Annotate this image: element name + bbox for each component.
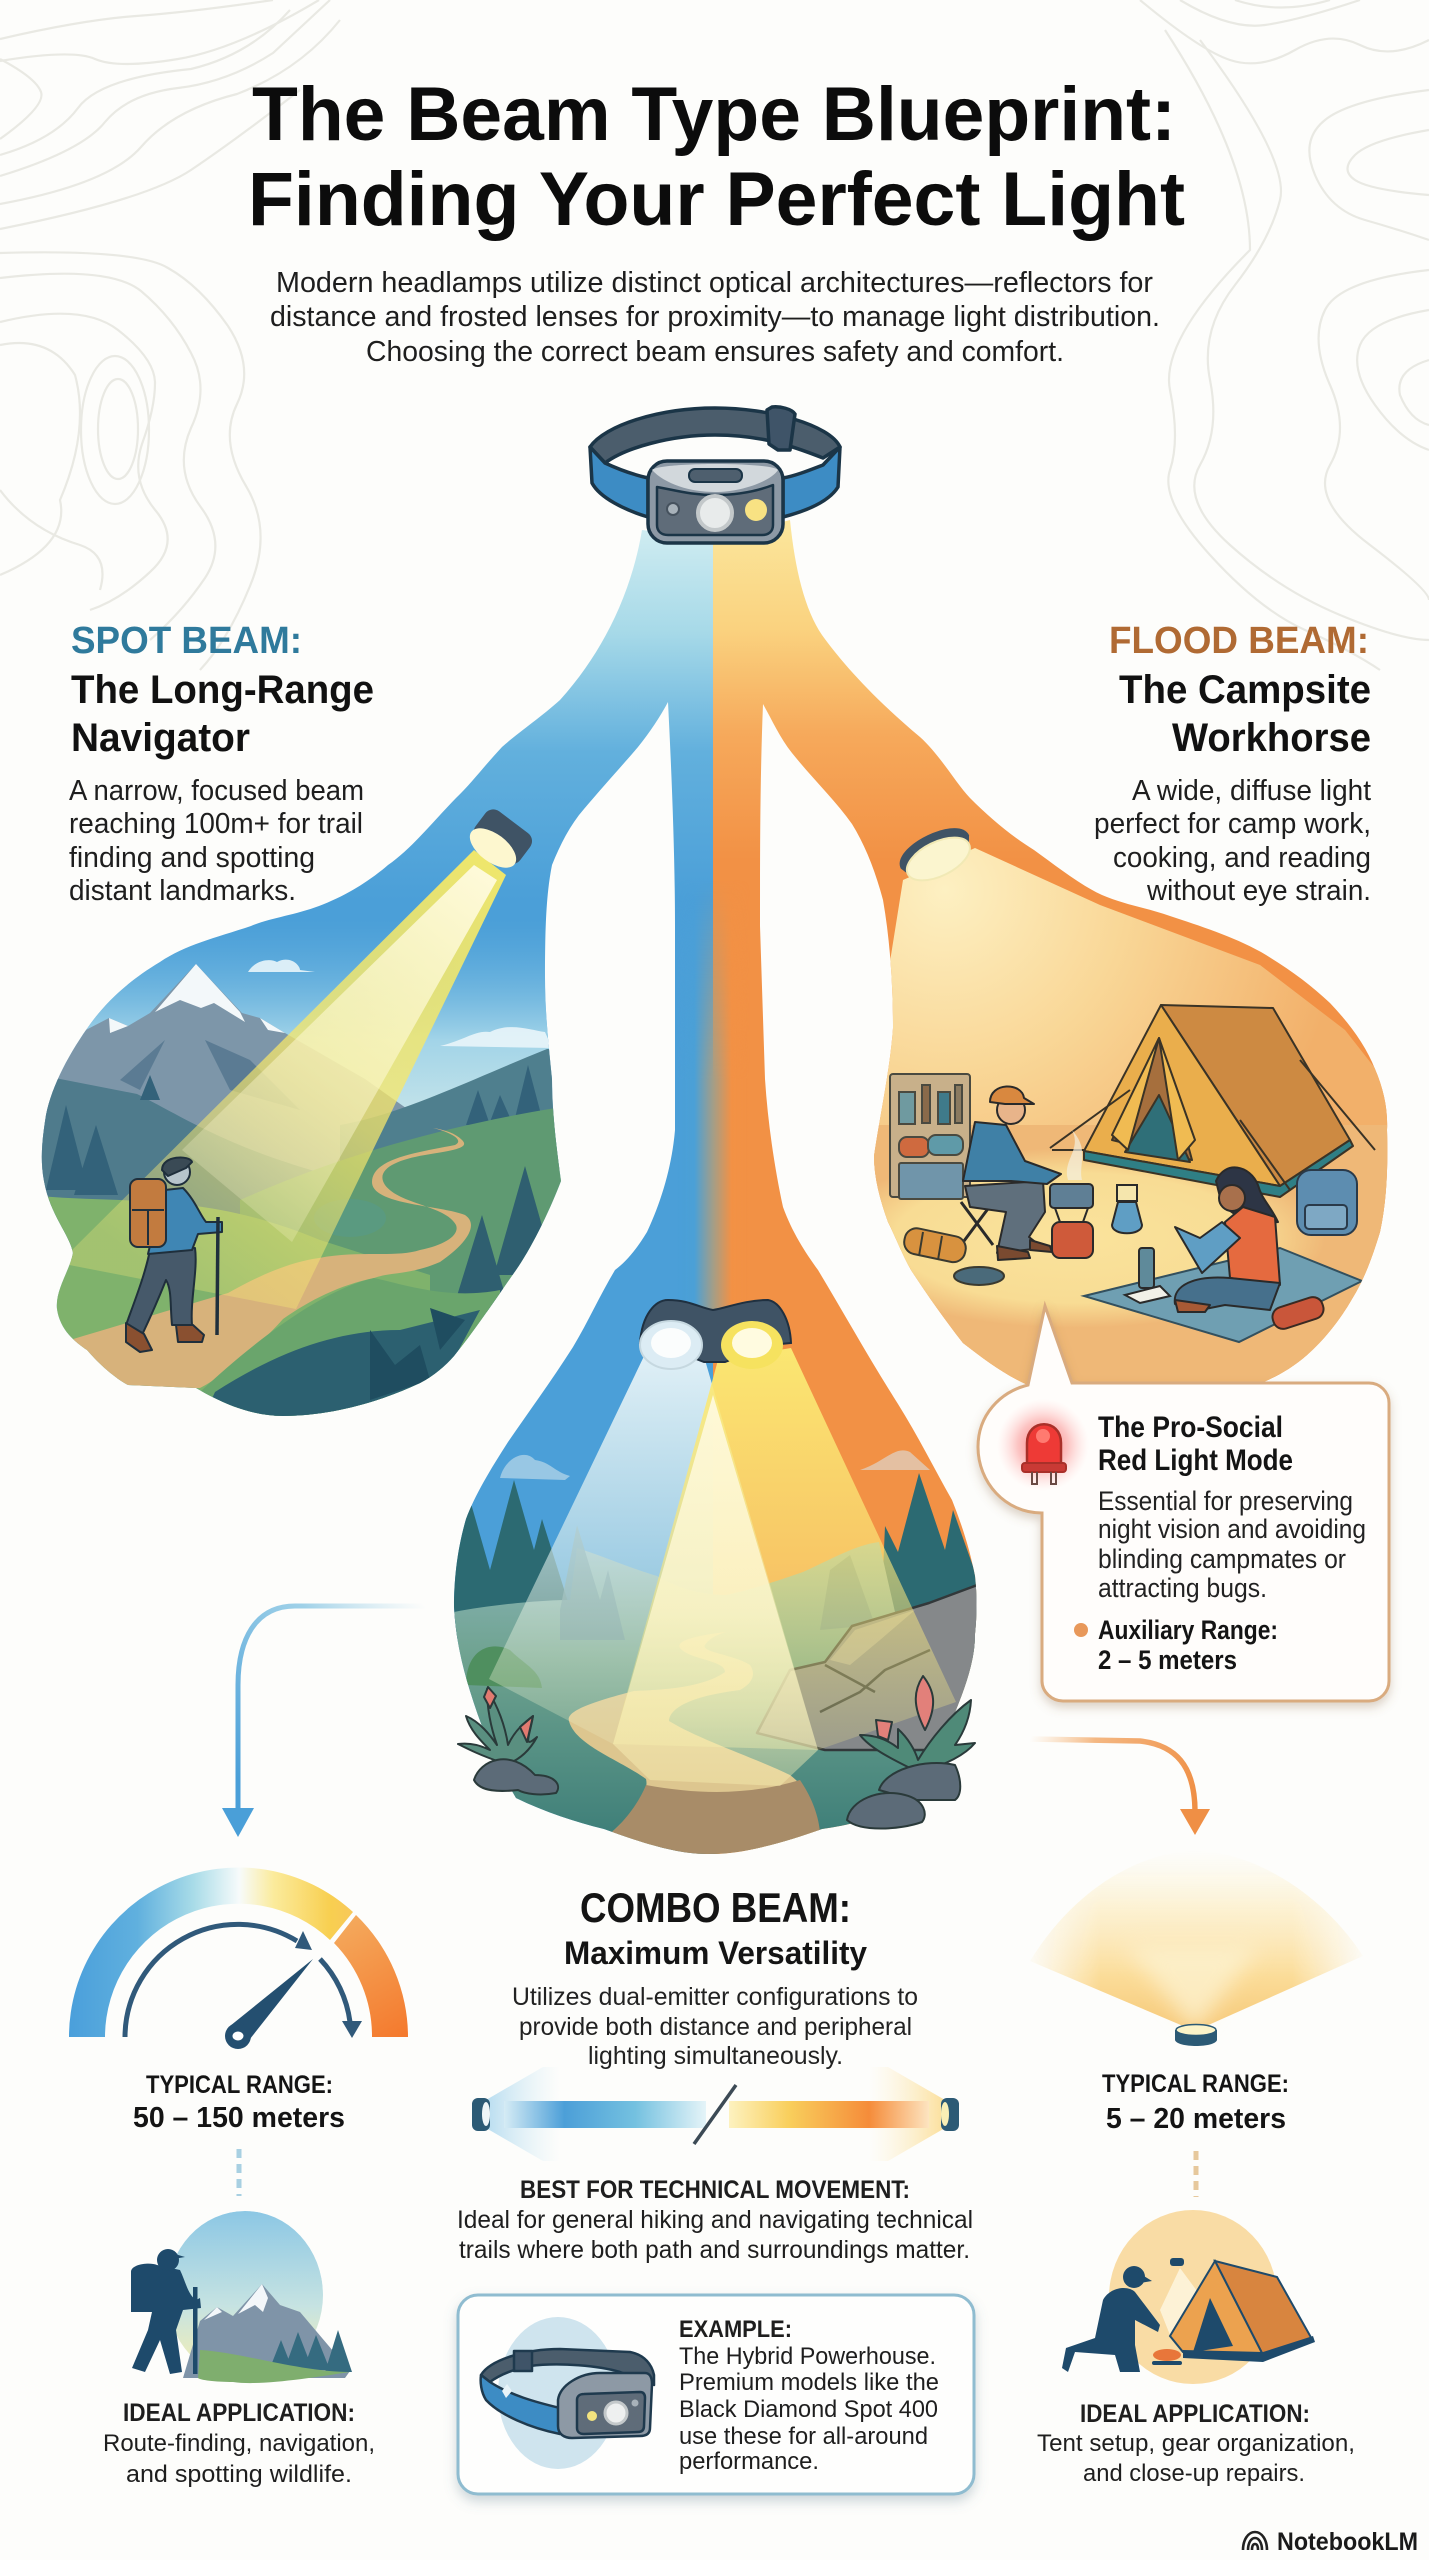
arrow: to flood details bbox=[1030, 1739, 1210, 1835]
title: The Beam Type Blueprint: bbox=[252, 72, 1176, 157]
dark hills and trees bbox=[30, 1049, 570, 1260]
auxiliary range: 2 – 5 meters bbox=[1098, 1645, 1237, 1675]
tent bbox=[1050, 1005, 1375, 1197]
intro text: distance and frosted lenses for proximity—to manage light distribution. bbox=[270, 301, 1160, 333]
auxiliary range bbox=[1074, 1615, 1278, 1675]
text: spot typical range bbox=[133, 2071, 345, 2134]
text: spot typical range: 50 – 150 meters bbox=[133, 2102, 345, 2134]
beam: spot light cone bbox=[59, 850, 506, 1309]
heading: flood beam bbox=[1109, 620, 1371, 760]
text: combo beam description: lighting simultaneously. bbox=[588, 2042, 843, 2070]
intro text: Choosing the correct beam ensures safety and comfort. bbox=[366, 336, 1064, 368]
mat bbox=[1084, 1248, 1362, 1342]
text: spot beam description: A narrow, focused beam bbox=[69, 775, 364, 807]
callout heading bbox=[1098, 1411, 1293, 1477]
example text: use these for all-around bbox=[679, 2423, 928, 2450]
text: flood beam description bbox=[1094, 775, 1371, 907]
callout body: attracting bugs. bbox=[1098, 1573, 1267, 1603]
text: flood ideal application: and close-up repairs. bbox=[1083, 2460, 1305, 2487]
woman reading bbox=[1175, 1167, 1280, 1312]
callout body: blinding campmates or bbox=[1098, 1544, 1346, 1574]
example text: Black Diamond Spot 400 bbox=[679, 2396, 938, 2423]
logo: NotebookLM: NotebookLM bbox=[1277, 2528, 1418, 2556]
heading: combo beam: COMBO BEAM: bbox=[580, 1884, 851, 1931]
chart: flood light spread bbox=[1030, 1851, 1363, 2046]
sleeping bag and lid bbox=[902, 1226, 1004, 1285]
gauge chart: spot range bbox=[69, 1867, 408, 2049]
text: spot beam description: distant landmarks. bbox=[69, 875, 296, 907]
text: best for technical movement: trails where both path and surroundings matter. bbox=[459, 2236, 970, 2264]
heading: spot beam: Navigator bbox=[71, 716, 250, 760]
headlamp: main bbox=[590, 407, 840, 543]
arrow: to spot details bbox=[222, 1606, 425, 1837]
title bbox=[248, 72, 1185, 242]
callout heading: The Pro-Social bbox=[1098, 1411, 1283, 1444]
text: spot beam description bbox=[69, 775, 364, 907]
right foreground flowers and stones bbox=[847, 1676, 975, 1828]
flood light cone bbox=[860, 848, 1400, 1400]
spot lamp bbox=[470, 809, 532, 868]
callout heading: Red Light Mode bbox=[1098, 1444, 1293, 1477]
thermos and note bbox=[1125, 1248, 1170, 1303]
heading: spot beam: SPOT BEAM: bbox=[71, 620, 302, 662]
trees left bbox=[454, 1480, 567, 1640]
trees right bbox=[884, 1473, 976, 1658]
text: flood typical range: TYPICAL RANGE: bbox=[1102, 2070, 1289, 2098]
text: spot ideal application: and spotting wildlife. bbox=[126, 2461, 352, 2488]
heading: combo beam bbox=[564, 1884, 867, 1971]
combo lamp bbox=[640, 1300, 791, 1369]
path lower shade bbox=[611, 1780, 820, 1855]
heading: spot beam bbox=[71, 620, 374, 760]
gear board and box bbox=[890, 1074, 970, 1199]
icon: example headlamp bbox=[481, 2317, 654, 2469]
left foreground flowers and stones bbox=[458, 1687, 558, 1794]
dashed connector: spot bbox=[236, 2149, 242, 2196]
topographic line pattern bbox=[0, 0, 1429, 670]
example text: Premium models like the bbox=[679, 2369, 939, 2396]
icon: hiker with mountains bbox=[131, 2211, 352, 2383]
text: spot ideal application bbox=[103, 2399, 375, 2488]
panel: spot beam scene bbox=[30, 805, 590, 1425]
dashed connector: flood bbox=[1194, 2151, 1198, 2197]
hiker bbox=[126, 1157, 222, 1352]
text: combo beam description: Utilizes dual-emitter configurations to bbox=[512, 1983, 918, 2011]
flood lamp bbox=[900, 828, 971, 881]
foreground bank with plants bbox=[190, 1278, 500, 1425]
trees: foreground right bbox=[458, 1166, 542, 1312]
trail bbox=[70, 1128, 471, 1388]
man cooking bbox=[961, 1086, 1061, 1260]
clouds bbox=[500, 1450, 930, 1480]
text: spot ideal application: IDEAL APPLICATION: bbox=[123, 2399, 355, 2427]
text: flood beam description: A wide, diffuse light bbox=[1132, 775, 1371, 807]
callout body: Essential for preserving bbox=[1098, 1486, 1353, 1516]
sky bbox=[57, 945, 561, 1339]
rocks bbox=[757, 1584, 980, 1750]
text: flood typical range: 5 – 20 meters bbox=[1106, 2103, 1286, 2135]
example text bbox=[679, 2316, 939, 2475]
text: best for technical movement: BEST FOR TECHNICAL MOVEMENT: bbox=[520, 2176, 910, 2204]
auxiliary range: Auxiliary Range: bbox=[1098, 1615, 1278, 1645]
title: Finding Your Perfect Light bbox=[248, 157, 1185, 242]
heading: flood beam: FLOOD BEAM: bbox=[1109, 620, 1369, 662]
text: flood beam description: perfect for camp work, bbox=[1094, 808, 1371, 840]
clouds bbox=[248, 960, 552, 1048]
text: combo beam description bbox=[512, 1983, 918, 2070]
heading: flood beam: Workhorse bbox=[1172, 716, 1371, 760]
text: flood beam description: cooking, and reading bbox=[1113, 842, 1371, 874]
icon: camper with tent bbox=[1062, 2210, 1315, 2384]
heading: flood beam: The Campsite bbox=[1119, 668, 1371, 712]
callout body bbox=[1098, 1486, 1366, 1603]
ground bbox=[874, 1125, 1388, 1384]
example text: performance. bbox=[679, 2448, 819, 2475]
example text: EXAMPLE: bbox=[679, 2316, 792, 2343]
distant pale trees bbox=[560, 1525, 875, 1640]
text: flood ideal application: Tent setup, gear organization, bbox=[1037, 2430, 1355, 2457]
stove, pot and steam bbox=[1050, 1130, 1093, 1258]
intro text: Modern headlamps utilize distinct optical architectures—reflectors for bbox=[276, 267, 1153, 299]
panel: combo beam scene bbox=[440, 1300, 990, 1860]
callout: red light mode bbox=[978, 1306, 1389, 1701]
text: spot beam description: finding and spotting bbox=[69, 842, 315, 874]
text: combo beam description: provide both distance and peripheral bbox=[519, 2013, 912, 2041]
meadows bbox=[30, 1105, 575, 1420]
heading: spot beam: The Long-Range bbox=[71, 668, 374, 712]
beam streams: blue and orange branches bbox=[42, 520, 1387, 1854]
text: flood ideal application bbox=[1037, 2400, 1355, 2487]
mid bush bbox=[466, 1646, 542, 1688]
text: flood beam description: without eye strain. bbox=[1146, 875, 1371, 907]
panel: flood beam scene bbox=[874, 828, 1388, 1384]
text: best for technical movement bbox=[457, 2176, 973, 2264]
text: best for technical movement: Ideal for general hiking and navigating technical bbox=[457, 2206, 973, 2234]
text: flood ideal application: IDEAL APPLICATION: bbox=[1080, 2400, 1310, 2428]
intro text bbox=[270, 267, 1160, 368]
panel: example box bbox=[458, 2295, 974, 2494]
winding path bbox=[569, 1632, 818, 1852]
chart: combo beam spectrum bar bbox=[472, 2067, 959, 2161]
callout body: night vision and avoiding bbox=[1098, 1514, 1366, 1544]
dual beam cones bbox=[489, 1348, 956, 1786]
icon: red LED bbox=[997, 1399, 1089, 1491]
example text: The Hybrid Powerhouse. bbox=[679, 2343, 936, 2370]
mountain bbox=[40, 964, 430, 1210]
text: spot ideal application: Route-finding, navigation, bbox=[103, 2430, 375, 2457]
heading: combo beam: Maximum Versatility bbox=[564, 1935, 867, 1971]
hills and ground bbox=[440, 1542, 990, 1860]
lantern bbox=[1112, 1185, 1142, 1233]
text: spot typical range: TYPICAL RANGE: bbox=[146, 2071, 333, 2099]
text: spot beam description: reaching 100m+ for trail bbox=[69, 808, 363, 840]
red dry bag bbox=[1272, 1296, 1324, 1330]
text: flood typical range bbox=[1102, 2070, 1289, 2135]
backpack bbox=[1297, 1170, 1357, 1235]
